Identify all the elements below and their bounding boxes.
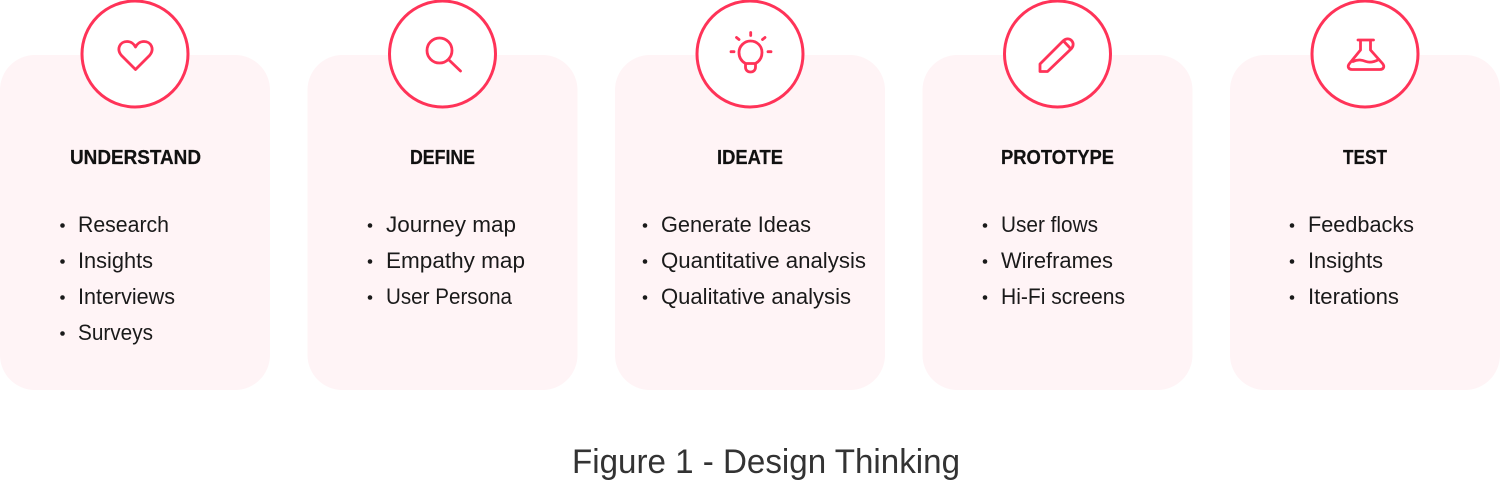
bullet list: Insights: [1308, 248, 1383, 273]
bullet list: [60, 212, 175, 345]
bullet list: [1290, 212, 1414, 309]
bullet list: Wireframes: [1001, 248, 1113, 273]
bullet list: [983, 212, 1125, 309]
card background: [1230, 55, 1500, 390]
card background: [308, 55, 578, 390]
bullet list: Surveys: [78, 320, 153, 345]
icon: light bulb: [697, 1, 803, 107]
heading: PROTOTYPE: [1001, 147, 1114, 169]
bullet list: Hi-Fi screens: [1001, 284, 1125, 309]
heading: DEFINE: [410, 147, 475, 169]
panel: understand: [0, 1, 270, 390]
icon: pencil: [1004, 1, 1110, 107]
panel: test: [1230, 1, 1500, 390]
bullet list: [368, 212, 525, 309]
bullet list: Insights: [78, 248, 153, 273]
bullet list: Interviews: [78, 284, 175, 309]
card background: [922, 55, 1192, 390]
card background: [0, 55, 270, 390]
heading: TEST: [1343, 147, 1387, 169]
bullet list: User Persona: [386, 284, 513, 309]
panel: ideate: [615, 1, 885, 390]
bullet list: Empathy map: [386, 248, 525, 273]
heading: IDEATE: [717, 147, 783, 169]
bullet list: Journey map: [386, 212, 516, 237]
figure caption: Figure 1 - Design Thinking: [572, 443, 960, 480]
bullet list: Qualitative analysis: [661, 284, 851, 309]
bullet list: Quantitative analysis: [661, 248, 866, 273]
card background: [615, 55, 885, 390]
bullet list: Feedbacks: [1308, 212, 1414, 237]
heading: UNDERSTAND: [70, 147, 201, 169]
bullet list: Research: [78, 212, 169, 237]
bullet list: User flows: [1001, 212, 1098, 237]
icon: heart: [82, 1, 188, 107]
icon: flask: [1312, 1, 1418, 107]
icon: magnifying glass: [390, 1, 496, 107]
bullet list: [643, 212, 866, 309]
bullet list: Iterations: [1308, 284, 1399, 309]
panel: prototype: [922, 1, 1192, 390]
panel: define: [308, 1, 578, 390]
bullet list: Generate Ideas: [661, 212, 811, 237]
